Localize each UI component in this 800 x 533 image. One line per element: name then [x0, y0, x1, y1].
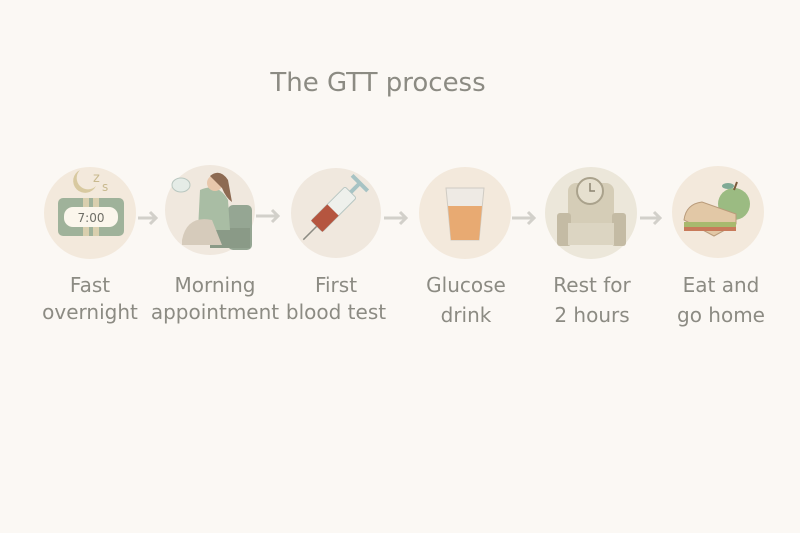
step 2: morning appointment	[151, 165, 279, 324]
icon: moon and alarm clock: z	[93, 171, 100, 186]
icon: moon and alarm clock: 7:00	[78, 211, 104, 225]
icon: moon and alarm clock	[58, 170, 124, 236]
icon: woman in chair	[172, 173, 252, 250]
step 3: first blood test	[286, 168, 386, 324]
step 4: glucose drink	[419, 167, 511, 327]
icon: sandwich and apple	[684, 182, 750, 236]
step 1: fast overnight	[42, 167, 138, 324]
step 6: eat and go home	[672, 166, 765, 327]
step 5: rest for 2 hours: 2 hours	[554, 303, 630, 327]
arrow 5	[640, 212, 660, 224]
icon: syringe	[296, 174, 369, 247]
step 4: glucose drink: drink	[441, 303, 492, 327]
step 5: rest for 2 hours	[545, 167, 637, 327]
step 3: first blood test: blood test	[286, 300, 386, 324]
arrow 2	[256, 210, 278, 222]
arrow 4	[512, 212, 534, 224]
title: The GTT process	[269, 68, 486, 98]
arrow 3	[384, 212, 406, 224]
label: Rest for	[553, 273, 631, 297]
label: Eat and	[683, 273, 759, 297]
label: Fast	[70, 273, 110, 297]
step 1: fast overnight: overnight	[42, 300, 138, 324]
icon: armchair and clock	[557, 178, 626, 246]
step 2: morning appointment: appointment	[151, 300, 279, 324]
icon: moon and alarm clock: s	[102, 180, 108, 194]
label: Morning	[175, 273, 255, 297]
step 6: eat and go home: go home	[677, 303, 765, 327]
label: Glucose	[426, 273, 506, 297]
icon: glass of juice	[446, 188, 484, 240]
label: First	[315, 273, 357, 297]
arrow 1	[138, 212, 156, 224]
